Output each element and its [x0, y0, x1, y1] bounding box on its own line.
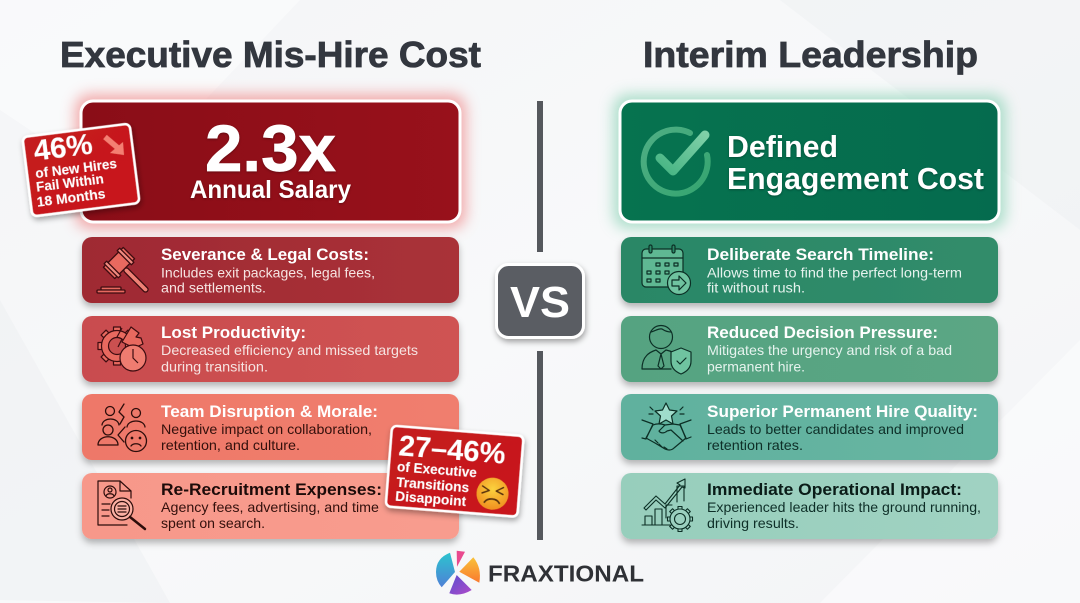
logo: fraxtional [436, 551, 644, 595]
icon: growth chart with gear [642, 479, 692, 532]
hero card: defined engagement cost [613, 94, 1006, 229]
logo: fraxtional: FRAXTIONAL [488, 560, 644, 586]
vs divider bottom [537, 351, 543, 540]
left title: Executive Mis-Hire Cost [60, 34, 481, 75]
row: severance and legal costs: Severance & Legal Costs: [161, 245, 369, 264]
icon: team with sad face [98, 404, 146, 452]
callout: 27-46% of executive transitions disappoint [386, 426, 524, 517]
row: team disruption and morale: Team Disruption & Morale: [161, 402, 378, 421]
panel: executive mis-hire cost [75, 94, 466, 539]
callout: 27-46% of executive transitions disappoint: 27–46% [398, 430, 507, 470]
right title: Interim Leadership [643, 34, 978, 75]
vs badge: VS [510, 278, 570, 327]
vs divider top [537, 101, 543, 252]
row: team disruption and morale: Negative impact on collaboration, [161, 421, 372, 437]
callout: 46% of new hires: Fail Within [35, 170, 105, 195]
callout: 46% of new hires: of New Hires [34, 155, 118, 181]
icon: handshake with star [642, 403, 691, 450]
hero card: 2.3x annual salary [75, 94, 466, 229]
hero card: 2.3x annual salary: Annual Salary [190, 176, 351, 204]
row: team disruption and morale [82, 394, 459, 460]
row: re-recruitment expenses [82, 473, 459, 539]
row: re-recruitment expenses: Re-Recruitment Expenses: [161, 480, 382, 499]
icon: gavel [97, 246, 157, 301]
row: deliberate search timeline [621, 237, 998, 303]
row: deliberate search timeline: Deliberate Search Timeline: [707, 245, 934, 264]
row: lost productivity: Decreased efficiency and missed targets [161, 342, 418, 358]
row: re-recruitment expenses: spent on search. [161, 515, 265, 531]
row: team disruption and morale: retention, and culture. [161, 437, 300, 453]
row: immediate operational impact: driving results. [707, 515, 799, 531]
callout: 27-46% of executive transitions disappoint: Disappoint [395, 488, 467, 509]
callout: 46% of new hires [22, 124, 140, 216]
row: re-recruitment expenses: Agency fees, advertising, and time [161, 499, 379, 515]
row: deliberate search timeline: Allows time to find the perfect long-term [707, 264, 962, 280]
icon: down arrow [105, 137, 124, 155]
icon: resume and magnifier [98, 481, 145, 529]
hero card: defined engagement cost: Defined [727, 129, 838, 164]
row: immediate operational impact: Experienced leader hits the ground running, [707, 499, 981, 515]
row: deliberate search timeline: fit without rush. [707, 280, 805, 296]
icon: leader with shield [642, 326, 691, 374]
row: superior permanent hire quality: Leads to better candidates and improved [707, 421, 964, 437]
row: immediate operational impact: Immediate Operational Impact: [707, 480, 962, 499]
row: superior permanent hire quality [621, 394, 998, 460]
icon: check circle [644, 130, 708, 194]
row: lost productivity: during transition. [161, 358, 268, 374]
icon: pinwheel [436, 551, 480, 595]
panel: interim leadership [613, 94, 1006, 539]
icon: calendar with arrow [642, 245, 690, 294]
hero card: defined engagement cost: Engagement Cost [727, 161, 984, 196]
row: severance and legal costs: Includes exit packages, legal fees, [161, 264, 375, 280]
row: reduced decision pressure [621, 316, 998, 382]
row: immediate operational impact [621, 473, 998, 539]
icon: angry face emoji [475, 477, 510, 511]
row: lost productivity: Lost Productivity: [161, 323, 306, 342]
callout: 46% of new hires: 18 Months [36, 185, 106, 210]
row: superior permanent hire quality: Superior Permanent Hire Quality: [707, 402, 978, 421]
row: severance and legal costs: and settlements. [161, 280, 266, 296]
hero card: 2.3x annual salary: 2.3x [205, 111, 336, 185]
callout: 46% of new hires: 46% [32, 128, 95, 168]
vs badge [496, 264, 584, 338]
row: reduced decision pressure: permanent hire. [707, 358, 805, 374]
row: reduced decision pressure: Reduced Decision Pressure: [707, 323, 938, 342]
callout: 27-46% of executive transitions disappoint: Transitions [396, 474, 470, 495]
row: severance and legal costs [82, 237, 459, 303]
callout: 27-46% of executive transitions disappoint: of Executive [396, 458, 478, 480]
row: lost productivity [82, 316, 459, 382]
icon: gear and clock [98, 327, 146, 371]
row: superior permanent hire quality: retention rates. [707, 437, 803, 453]
row: reduced decision pressure: Mitigates the urgency and risk of a bad [707, 342, 952, 358]
